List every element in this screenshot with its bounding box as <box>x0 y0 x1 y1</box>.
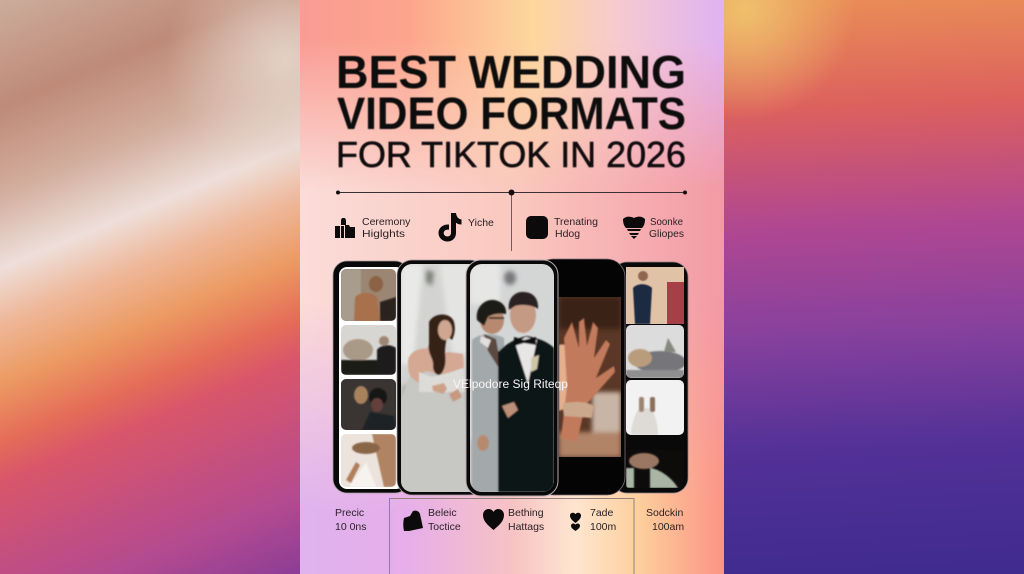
hair <box>429 314 455 375</box>
phone 4: black phone with hands photo <box>546 258 626 496</box>
phone 3: couple, front phone <box>466 260 558 496</box>
icon: heart <box>483 509 504 530</box>
bottom text: precic <box>335 507 367 533</box>
bottom item: betting: Bething <box>508 507 544 519</box>
bottom item: basic <box>403 507 461 533</box>
photo: dark portrait <box>341 379 396 430</box>
photo: embracing couple <box>341 269 396 321</box>
left gradient background <box>0 0 300 574</box>
title <box>336 46 686 175</box>
icon: bars <box>335 218 355 238</box>
icon: layered heart shield <box>623 217 645 228</box>
bottom item: basic: Toctice <box>428 521 461 533</box>
left man grey suit <box>472 334 510 492</box>
bottom item: 7ade: 7ade <box>590 507 614 519</box>
title: BEST WEDDING <box>336 46 686 98</box>
icon: rounded square <box>526 216 548 239</box>
bottom text: precic: Precic <box>335 507 364 519</box>
header divider with dots <box>336 190 687 251</box>
format row: trending hook: Hdog <box>555 228 580 240</box>
photo: lying couple <box>626 325 686 378</box>
icon: tiktok note <box>438 213 462 242</box>
format row: scenic clips: Gliopes <box>649 228 684 240</box>
photo: hands <box>626 452 679 488</box>
bottom item: 7ade <box>570 507 617 533</box>
bottom text: sodckin: Sodckin <box>646 507 684 519</box>
bottom text: precic: 10 0ns <box>335 521 367 533</box>
photo: bride on white <box>626 380 684 435</box>
dress <box>401 368 471 492</box>
photo: bride and florals <box>341 434 396 487</box>
bottom caption box <box>390 498 634 574</box>
title: FOR TIKTOK IN 2026 <box>336 134 686 175</box>
phone 2: bride <box>397 260 485 495</box>
arm and shoulders <box>407 347 464 384</box>
icon: stacked hearts <box>570 513 581 523</box>
format row: tiktok niche: Yiche <box>468 217 494 229</box>
phone 1: photo grid left <box>333 261 409 493</box>
format row: ceremony highlights <box>335 216 411 240</box>
right gradient background <box>724 0 1024 574</box>
phone 5: photo grid right <box>612 262 688 493</box>
photo: groom standing <box>626 267 684 324</box>
bottom item: basic: Beleic <box>428 507 457 519</box>
bottom item: betting: Hattags <box>508 521 544 533</box>
format row: ceremony highlights: Ceremony <box>362 216 411 228</box>
right man black tux <box>498 336 554 492</box>
format row: scenic clips <box>623 216 684 240</box>
title: VIDEO FORMATS <box>337 88 686 139</box>
dress bodice <box>419 368 465 392</box>
bottom item: 7ade: 100m <box>590 521 617 533</box>
phone overlay caption: VElpodore Sig Riteqp <box>453 379 568 391</box>
format row: trending hook: Trenating <box>554 216 598 228</box>
bottom text: sodckin <box>646 507 684 533</box>
format row: tiktok niche <box>438 213 494 242</box>
format row: ceremony highlights: Higlghts <box>362 228 405 240</box>
format row: scenic clips: Soonke <box>650 216 683 228</box>
central poster background <box>300 0 724 574</box>
bottom item: betting <box>483 507 544 533</box>
bottom text: sodckin: 100am <box>652 521 684 533</box>
photo: florals and couple <box>341 325 396 375</box>
icon: blob <box>403 511 423 531</box>
format row: trending hook <box>526 216 598 240</box>
